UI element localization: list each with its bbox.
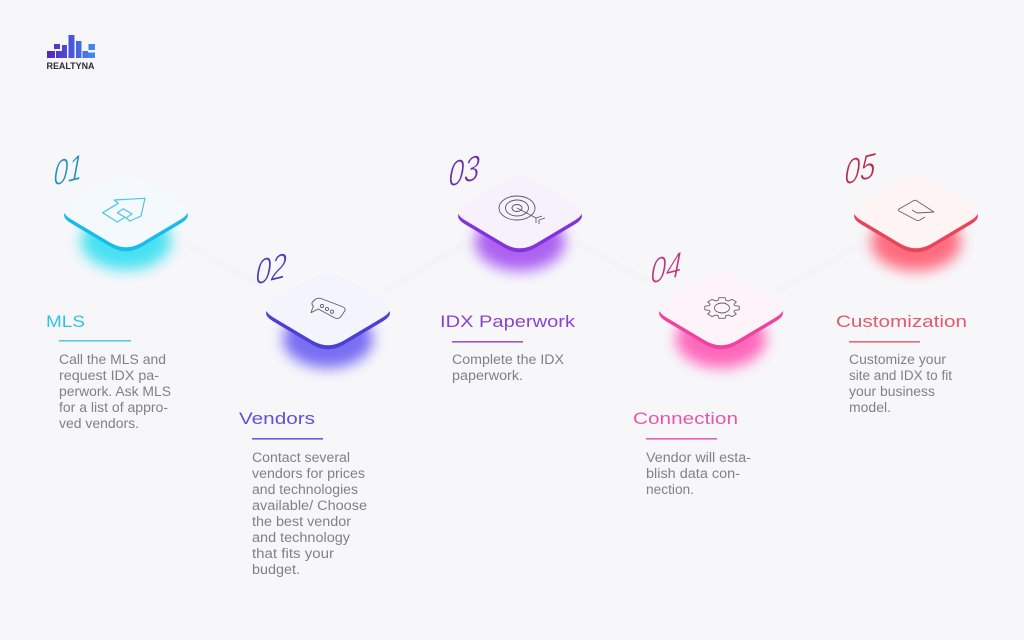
card: MLS [64,175,188,270]
text: MLS description: perwork. Ask MLS [59,384,171,399]
step 2: Vendors [239,245,390,577]
icon: target [499,196,545,224]
text: MLS description: Call the MLS and [59,352,166,367]
text: Vendors description: vendors for prices [252,466,365,481]
number 05: 05 [844,145,877,193]
text: Vendors description: and technology [252,530,350,545]
step 4: Connection [633,244,783,497]
text: Vendors description: Contact several [252,450,350,465]
heading: Vendors: Vendors [239,409,315,428]
logo: Realtyna [46,35,95,71]
text: Customization description: site and IDX to fit [849,368,952,383]
icon: gear [705,298,739,318]
step 3: IDX Paperwork [440,147,582,383]
heading: Connection: Connection [633,409,738,428]
text: Vendors description: available/ Choose [252,498,367,513]
text: Vendors description: that fits your [252,546,335,561]
number 02: 02 [255,245,288,293]
number 03: 03 [448,147,481,195]
text: MLS description: request IDX pa- [59,368,159,383]
text: IDX Paperwork description: paperwork. [452,368,523,383]
text: Customization description [849,352,952,415]
step 5: Customization [836,145,978,415]
card: Customization [854,176,978,271]
text: Customization description: Customize your [849,352,947,367]
card: IDX Paperwork [458,176,582,271]
text: Vendors description: budget. [252,562,300,577]
number 01: 01 [53,146,84,194]
text: MLS description [59,352,171,431]
text: Customization description: model. [849,400,891,415]
card: Connection [659,273,783,368]
text: Vendors description: and technologies [252,482,358,497]
text: Customization description: your business [849,384,935,399]
card: Vendors [266,273,390,368]
number 04: 04 [650,244,683,292]
icon: speech bubble [311,298,345,318]
heading: IDX Paperwork: IDX Paperwork [440,312,576,331]
icon: check diamond [898,200,934,220]
step 1: MLS [46,146,188,431]
icon: house arrow [103,198,145,222]
text: Connection description: nection. [646,482,694,497]
text: Connection description: blish data con- [646,466,740,481]
text: IDX Paperwork description: Complete the IDX [452,352,564,367]
text: Connection description: Vendor will esta- [646,450,751,465]
text: Connection description [646,450,751,497]
text: MLS description: for a list of appro- [59,400,168,415]
text: Vendors description [252,450,367,577]
heading: MLS: MLS [46,312,85,331]
text: MLS description: ved vendors. [59,416,139,431]
logo: Realtyna: REALTYNA [46,61,95,71]
text: Vendors description: the best vendor [252,514,352,529]
heading: Customization: Customization [836,312,967,331]
text: IDX Paperwork description [452,352,564,383]
